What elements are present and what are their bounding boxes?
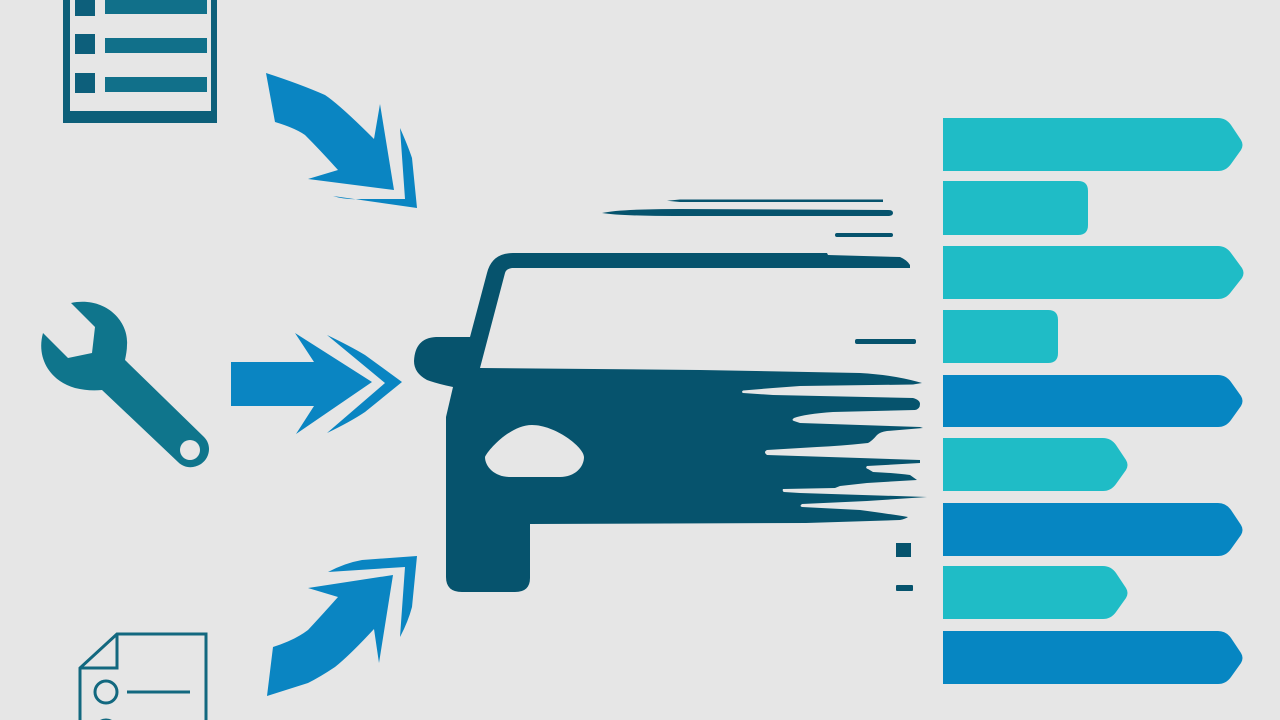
arrow: from checklist to car <box>266 73 417 208</box>
bar 1 <box>943 118 1242 171</box>
speed streak <box>855 339 916 344</box>
arrow: from form to car <box>267 556 417 696</box>
speed streak <box>602 209 893 216</box>
bar 9 <box>943 631 1242 684</box>
bar 3 <box>943 246 1244 299</box>
bar 2 <box>943 181 1088 235</box>
icon: checklist document <box>63 0 217 123</box>
speed streak <box>667 200 883 202</box>
icon: form document <box>80 634 206 720</box>
car with speed streaks <box>414 200 927 592</box>
icon: wrench <box>41 302 209 467</box>
bar 6 <box>943 438 1128 491</box>
bar 4 <box>943 310 1058 363</box>
speed streak <box>835 233 893 237</box>
car body <box>414 253 927 592</box>
square fragment <box>896 543 911 557</box>
bar 8 <box>943 566 1128 619</box>
bar 7 <box>943 503 1242 556</box>
arrow: from wrench to car <box>231 333 402 434</box>
bar chart: output bars <box>943 118 1244 684</box>
small fragment <box>896 585 913 591</box>
bar 5 <box>943 375 1242 427</box>
